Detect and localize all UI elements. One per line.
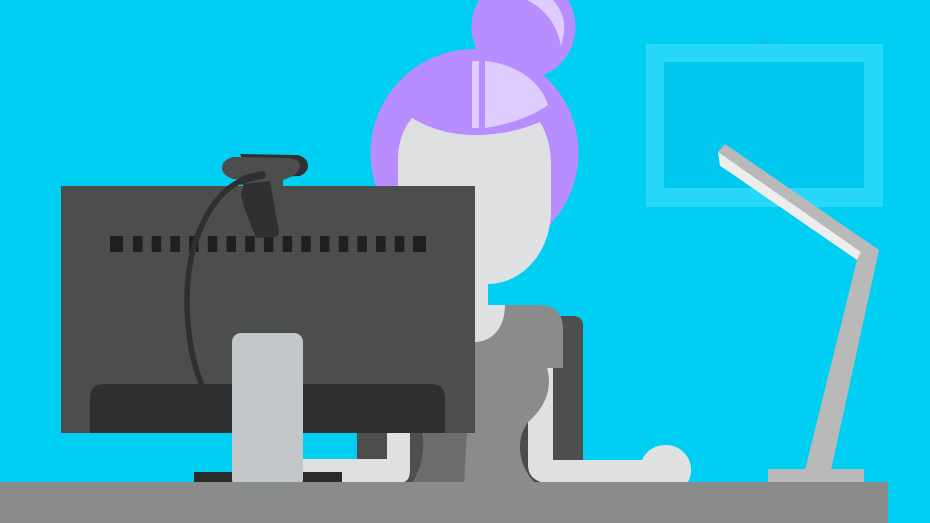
hair [370, 0, 578, 257]
hair highlight stripe [472, 61, 479, 128]
monitor stand [232, 333, 303, 488]
desk lamp [718, 144, 879, 483]
webcam rear [240, 154, 308, 178]
hair bun [472, 0, 576, 79]
torso shadow left [400, 430, 430, 483]
desk [0, 482, 888, 523]
chair back [530, 316, 583, 460]
webcam clip [241, 181, 279, 238]
left arm [300, 430, 410, 482]
chair panel [412, 433, 470, 483]
monitor back [61, 186, 475, 433]
webcam [222, 154, 308, 238]
torso shadow right [505, 420, 540, 483]
torso shirt [464, 305, 563, 483]
right arm and hand [528, 366, 691, 482]
shoulder skin [470, 305, 508, 346]
monitor stand foot [194, 472, 342, 483]
bun highlight [527, 0, 564, 47]
hair main [370, 49, 578, 257]
wall picture frame [646, 30, 883, 207]
webcam front [222, 157, 300, 187]
webcam cable [187, 175, 262, 385]
monitor lower band [90, 384, 445, 433]
monitor vents [110, 236, 426, 252]
hair highlight lobe [485, 61, 548, 128]
chair seat behind left arm [357, 430, 388, 460]
monitor [61, 186, 475, 433]
face and neck [398, 118, 551, 312]
